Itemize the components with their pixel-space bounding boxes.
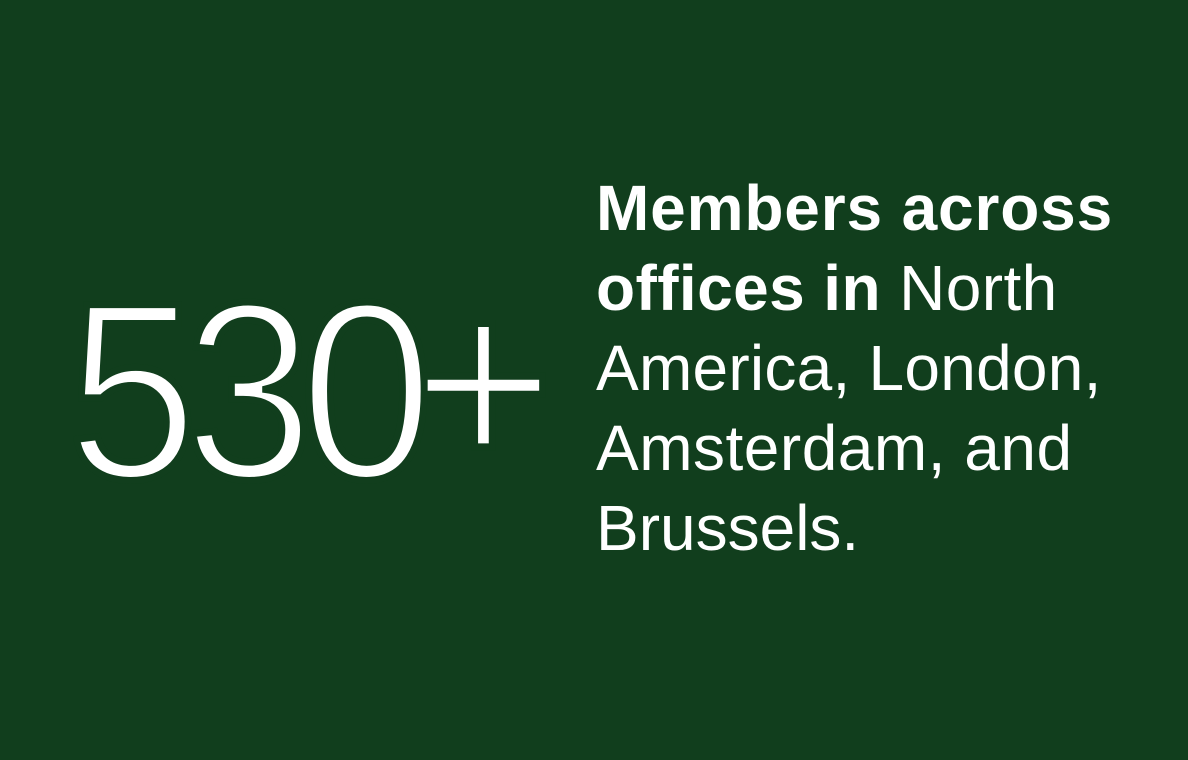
big number: 530+: 5 — [67, 250, 198, 532]
description text: Amsterdam, and — [596, 412, 1073, 484]
description text — [596, 172, 1113, 564]
description text: Brussels. — [596, 492, 859, 564]
big number: 530+ — [67, 241, 555, 532]
description text: offices in North — [596, 252, 1058, 324]
big number: 530+: 3 — [184, 251, 313, 532]
big number: 530+: + — [412, 241, 555, 523]
description text: America, London, — [596, 332, 1102, 404]
description text: Members across — [596, 172, 1113, 244]
big number: 530+: 0 — [300, 251, 433, 532]
